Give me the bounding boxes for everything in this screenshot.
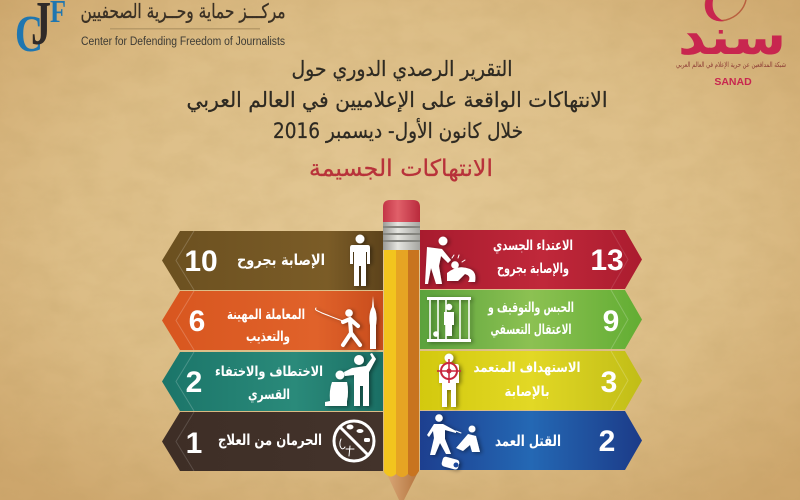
title block (186, 57, 608, 143)
pencil body (384, 249, 419, 477)
label: والتعذيب (246, 329, 290, 345)
logo: Center for Defending Freedom of Journalists (15, 0, 286, 63)
icon: targeted person (437, 354, 461, 407)
panel: injury, 10 (162, 231, 383, 290)
panel: degrading treatment and torture, 6 (162, 291, 383, 350)
number 13: 13 (590, 244, 624, 277)
icon: injured person (350, 234, 370, 286)
icon: abduction (325, 353, 376, 406)
title block: التقرير الرصدي الدوري حول (292, 57, 512, 81)
panel: abduction and enforced disappearance, 2 (162, 352, 383, 411)
label: القتل العمد (495, 432, 561, 450)
label: الاعتداء الجسدي (493, 238, 573, 255)
logo English name: Center for Defending Freedom of Journalists (81, 36, 285, 48)
label: الاختطاف والاختفاء (215, 364, 323, 380)
label: الاستهداف المتعمد (474, 360, 580, 376)
label: والإصابة بجروح (497, 261, 569, 277)
pencil (383, 200, 420, 500)
label (487, 300, 574, 338)
number 1: 1 (186, 427, 202, 460)
heading: grave violations: الانتهاكات الجسيمة (309, 156, 493, 182)
SANAD label: SANAD (714, 76, 752, 88)
icon: assault (425, 236, 475, 284)
panel: denial of treatment, 1 (162, 412, 383, 471)
label (474, 360, 580, 400)
label (215, 364, 323, 404)
icon: no medicine (334, 421, 374, 461)
panel: physical assault and injury, 13 (420, 230, 642, 289)
label (493, 238, 573, 277)
number 2: 2 (599, 425, 615, 458)
panel: deliberate killing, 2 (420, 411, 642, 470)
logo: SANAD (676, 0, 786, 88)
label (227, 307, 305, 345)
label: الحبس والتوقيف و (487, 300, 574, 316)
SANAD wordmark: سند (678, 8, 786, 66)
number 10: 10 (184, 245, 218, 278)
label: الاعتقال التعسفي (490, 322, 572, 338)
pencil tip (386, 472, 418, 500)
title block: خلال كانون الأول- ديسمبر 2016 (273, 118, 523, 143)
panel: detention and arbitrary arrest, 9 (420, 290, 642, 349)
label: الحرمان من العلاج (218, 431, 322, 449)
icon: CJF monogram: C (15, 6, 43, 63)
label: المعاملة المهينة (227, 307, 305, 323)
icon: prison cell (427, 297, 471, 342)
icon: bird (705, 0, 746, 21)
label: القسري (248, 387, 290, 404)
label: بالإصابة (504, 384, 550, 400)
icon: shooting and camera (427, 414, 480, 470)
icon: CJF monogram (15, 0, 66, 63)
number 6: 6 (189, 305, 205, 338)
label: الإصابة بجروح (237, 251, 325, 269)
pencil eraser (383, 200, 420, 222)
panel: deliberate targeting, 3 (420, 351, 642, 410)
title block: الانتهاكات الواقعة على الإعلاميين في العالم العربي (186, 88, 608, 113)
pencil ferrule (383, 222, 420, 250)
number 2: 2 (186, 366, 202, 399)
icon: whipping (315, 296, 377, 349)
number 9: 9 (603, 305, 619, 338)
number 3: 3 (601, 366, 617, 399)
